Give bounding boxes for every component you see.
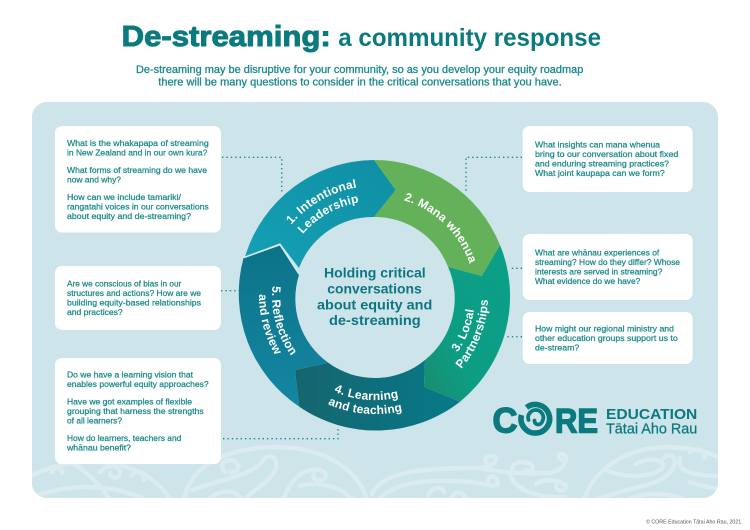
question card: learning vision: Do we have a learning vision that [67, 370, 194, 380]
segment 5: reflection and review: 5. Reflection [272, 286, 296, 356]
title: a community response [338, 24, 601, 52]
question card: whakapapa: in New Zealand and in our own kura? [67, 147, 208, 157]
centre text: about equity and [317, 297, 432, 312]
segment 1: intentional leadership [245, 160, 396, 268]
divider between segments 5 and 1 [244, 244, 299, 274]
logo: CORE Education: C [492, 402, 518, 440]
copyright: © CORE Education Tātai Aho Rau, 2021. [646, 518, 743, 525]
question card: whakapapa: now and why? [67, 174, 121, 184]
question card: regional ministry [523, 312, 693, 364]
segment 5: reflection and review [238, 246, 328, 407]
icon: koru swirl O [521, 404, 550, 433]
subtitle: there will be many questions to consider in the critical conversations that you have. [158, 76, 562, 88]
centre text: conversations [327, 281, 422, 296]
question card: regional ministry: other education groups support us to [535, 333, 678, 343]
segment 2: mana whenua: 2. Mana whenua [404, 193, 475, 264]
question card: learning vision: of all learners? [67, 416, 122, 426]
question card: bias: and practices? [67, 307, 123, 317]
logo: CORE Education: RE [555, 402, 598, 440]
segment 4: learning and teaching: 4. Learning [334, 385, 398, 401]
question card: whanau experiences: streaming? How do they differ? Whose [535, 257, 680, 267]
question card: whanau experiences [523, 234, 693, 300]
segment 4: learning and teaching: and teaching [328, 399, 402, 414]
question card: bias: Are we conscious of bias in our [67, 279, 182, 289]
question card: learning vision: grouping that harness the strengths [67, 406, 204, 416]
segment 2: mana whenua [374, 160, 500, 276]
question card: whakapapa: What is the whakapapa of streaming [67, 138, 209, 148]
cycle diagram [238, 160, 510, 430]
question card: learning vision [55, 358, 221, 464]
centre text [317, 265, 432, 328]
question card: mana whenua: and enduring streaming practices? [535, 159, 669, 169]
subtitle: De-streaming may be disruptive for your community, so as you develop your equity roadmap [136, 64, 583, 76]
centre text: de-streaming [329, 313, 421, 328]
question card: whanau experiences: interests are served in streaming? [535, 267, 663, 277]
panel: background [32, 102, 718, 498]
segment 1: intentional leadership: 1. Intentional [286, 179, 356, 224]
logo: CORE Education: Tātai Aho Rau [606, 420, 697, 437]
question card: mana whenua: bring to our conversation about fixed [535, 149, 679, 159]
question card: mana whenua: What joint kaupapa can we form? [535, 168, 665, 178]
question card: learning vision: enables powerful equity approaches? [67, 379, 209, 389]
centre text: Holding critical [324, 265, 426, 280]
question card: regional ministry: How might our regional ministry and [535, 324, 674, 334]
question card: regional ministry: de-stream? [535, 343, 580, 353]
question card: whakapapa: about equity and de-streaming? [67, 211, 191, 221]
segment 3: local partnerships [424, 245, 510, 402]
question card: whakapapa: How can we include tamariki/ [67, 192, 182, 202]
title: De-streaming: [122, 21, 331, 53]
question card: whakapapa: rangatahi voices in our conversations [67, 201, 209, 211]
question card: learning vision: Have we got examples of flexible [67, 397, 192, 407]
koru pattern [28, 447, 722, 503]
question card: learning vision: How do learners, teachers and [67, 433, 182, 443]
segment 3: local partnerships: Partnerships [455, 300, 490, 368]
question card: mana whenua [523, 126, 693, 192]
question card: mana whenua: What insights can mana whenua [535, 140, 660, 150]
subtitle [136, 64, 583, 88]
question card: learning vision: whānau benefit? [66, 442, 131, 452]
dotted connectors [221, 157, 522, 439]
question card: whanau experiences: What are whānau experiences of [535, 248, 660, 258]
question card: bias [55, 266, 221, 330]
segment 4: learning and teaching [295, 360, 460, 430]
question card: whanau experiences: What evidence do we have? [535, 276, 641, 286]
logo: CORE Education: EDUCATION [606, 406, 697, 423]
question card: bias: structures and actions? How are we [67, 288, 201, 298]
question card: bias: building equity-based relationships [67, 298, 201, 308]
question card: whakapapa [55, 126, 221, 232]
segment 3: local partnerships: 3. Local [452, 309, 474, 352]
question card: whakapapa: What forms of streaming do we have [67, 165, 207, 175]
segment 1: intentional leadership: Leadership [297, 196, 358, 234]
title [122, 21, 601, 53]
logo: CORE Education [492, 402, 697, 440]
segment 5: reflection and review: and review [258, 294, 281, 354]
